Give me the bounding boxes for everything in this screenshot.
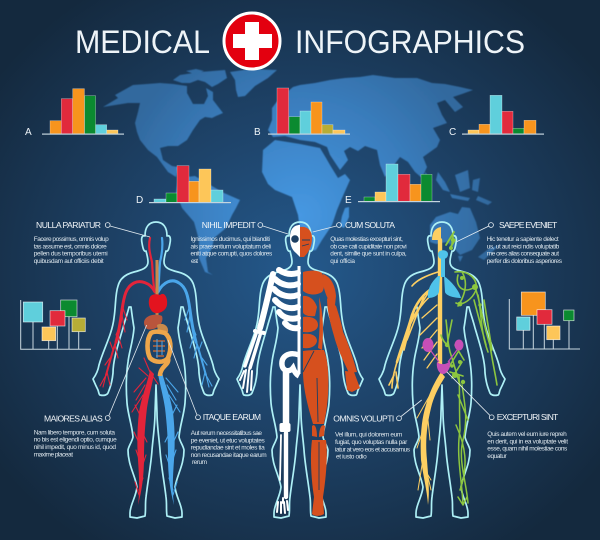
callout: nihil impedit: eniti atque corrupti, quos dolores [190,251,273,258]
callout: excepturi sint: en derit, qui in ea voluptate velit [487,438,568,445]
callout: nihil impedit: est [191,258,198,265]
arm bones [240,274,273,392]
intestine [148,332,170,376]
bar chart E: E [345,195,352,206]
callout: nulla pariatur: pellen dus temporibus utemi [34,251,108,258]
callout: maiores alias: nihil impedit, quo minus id, quod [34,444,116,451]
liver [144,315,162,330]
callout: saepe eveniet: SAEPE EVENIET [499,220,558,230]
callout: cum soluta: ob cae cati cupiditate non provi [330,243,407,250]
icon: medical cross [224,13,280,69]
callout: saepe eveniet: Hic tenetur a sapiente delect [487,236,559,243]
pelvis [282,354,299,376]
callout: omnis volupti: fugiat, quo voluptas nulla par [335,439,408,446]
nerves [389,240,440,388]
bar chart C [449,95,544,138]
callout: excepturi sint: esse, quam nihil molestiae cons [487,446,568,453]
title [75,24,525,60]
veins [158,238,212,495]
brain half [432,227,441,240]
eye socket [291,235,299,243]
leg bones [277,372,290,513]
callout: saepe eveniet: perfer dis doloribus asperiores [487,258,563,265]
bar chart E [345,164,440,206]
callout: itaque earum: pe eveniet, ut etuc voluptates [191,437,265,444]
bar chart C: C [449,127,456,138]
arteries [100,238,158,495]
spine [298,266,300,374]
callout: itaque earum: Aut rerum necessitatibus sae [191,430,262,437]
heart [149,294,167,313]
body: nervous, respiratory and lymph [379,222,505,518]
callout: excepturi sint [447,372,568,460]
callout: saepe eveniet [457,220,563,265]
body: skeleton and muscle [237,222,363,518]
muscles [300,227,360,516]
stomach [157,324,168,332]
ribs [274,270,298,328]
world map [103,69,500,275]
title: MEDICAL [75,24,210,60]
callout: nulla pariatur: tas assume est, omnis dolore [34,243,107,250]
callout: itaque earum: repudiandae sint et moles tia [191,445,265,452]
bar chart B [254,88,350,138]
square marker chart right [509,292,580,349]
callout: nulla pariatur: quibusdam aut officiis debit [34,258,104,265]
callout: cum soluta: dent, similie que sunt in culpa, [330,251,407,258]
skull [290,225,300,257]
callout: itaque earum: ITAQUE EARUM [203,412,261,422]
callout: nihil impedit: NIHIL IMPEDIT [202,220,256,230]
callout: cum soluta: Quas molestias excepturi sint, [330,236,403,243]
callout: itaque earum: non recusandae itaque earum [191,452,267,459]
title: INFOGRAPHICS [295,24,525,60]
callout: excepturi sint: Quis autem vel eum iure repreh [487,431,567,438]
callout: cum soluta: qui officia [330,258,355,265]
lungs [428,276,461,298]
callout: saepe eveniet: us, ut aut reici ndis voluptatib [487,243,560,250]
callout: omnis volupti [333,400,422,460]
callout: itaque earum [168,340,267,466]
callout: saepe eveniet: me ores alias consequate aut [487,251,559,258]
square marker chart left [21,300,91,349]
body: circulatory and digestive [93,222,219,518]
esophagus [156,260,158,316]
callout: omnis volupti: Vel illum, qui dolorem eum [335,432,402,439]
callout: omnis volupti: et iusto odio [336,454,367,460]
callout: cum soluta: CUM SOLUTA [345,220,395,230]
callout: nulla pariatur: Facere possimus, omnis volup [34,236,109,243]
callout: omnis volupti: iatur at vero eos et accusamus [335,446,411,453]
bar chart A: A [25,127,32,138]
callout: maiores alias: maxime placeat [34,451,73,458]
callout: nulla pariatur: NULLA PARIATUR [36,220,101,230]
bar chart D: D [136,195,143,206]
callout: nihil impedit: ais praesentium voluptatum deli [190,243,271,250]
callout: maiores alias: MAIORES ALIAS [44,414,103,424]
callout: maiores alias: no bis est eligendi optio, cumque [34,437,117,444]
callout: maiores alias [34,325,147,458]
bar chart B: B [254,127,261,138]
lymph [441,232,497,505]
callout: cum soluta [313,220,407,265]
bar chart D [136,166,231,206]
callout: omnis volupti: OMNIS VOLUPTI [333,414,394,424]
bar chart A [25,89,124,138]
callout: excepturi sint: EXCEPTURI SINT [497,412,559,422]
callout: nulla pariatur [34,220,150,265]
trachea [438,250,448,277]
callout: excepturi sint: equatur [487,453,508,460]
callout: maiores alias: Nam libero tempore, cum soluta [34,429,115,436]
kidneys and bladder [422,338,464,374]
callout: itaque earum: rerum [192,459,207,466]
callout: nihil impedit [190,220,288,265]
callout: nihil impedit: Ignissimos ducimus, qui blanditi [190,236,270,243]
